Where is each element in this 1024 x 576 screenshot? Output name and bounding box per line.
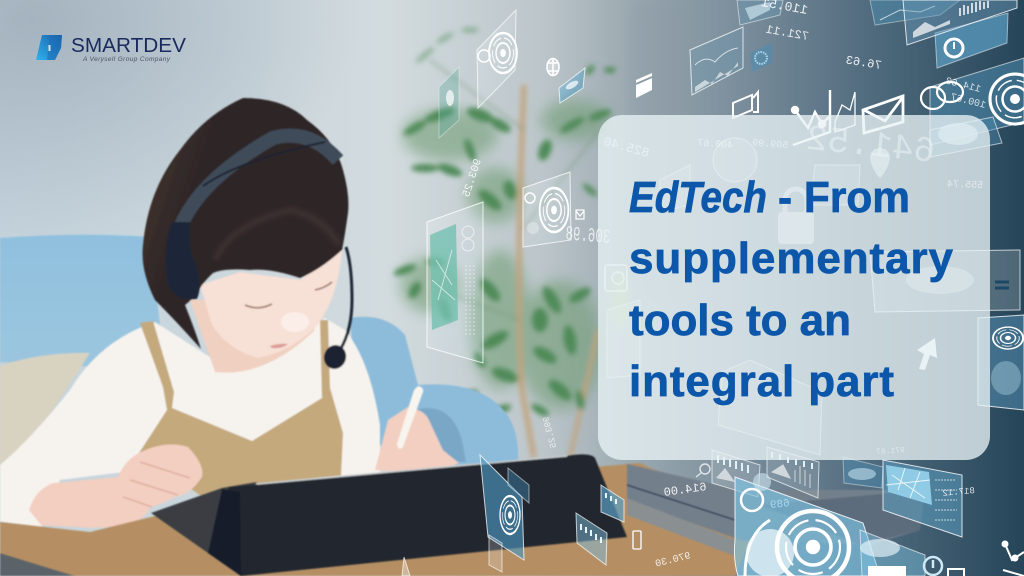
holo tile: dotted ring	[750, 43, 772, 72]
icon: small mail	[576, 210, 584, 219]
white shirt	[0, 318, 380, 528]
holo panel: tablet hub	[480, 455, 529, 572]
faint panel: world map	[870, 250, 1020, 312]
foliage haze	[400, 100, 609, 410]
holo panel: ring top centre	[477, 10, 517, 108]
wooden table	[0, 463, 760, 576]
mic foam	[321, 342, 349, 372]
girl with headset	[0, 98, 459, 528]
icon: video window	[733, 92, 758, 118]
holo panel: chart bars top right	[903, 0, 1017, 45]
holo panel: tablet small tile	[601, 485, 624, 522]
title: - From	[778, 173, 910, 222]
number: 970.30: 970.30	[654, 551, 692, 571]
tagline: A Verysell Group Company	[82, 56, 171, 63]
microphone boom	[340, 247, 352, 350]
holo panel: human ring	[930, 58, 1024, 145]
ear cup	[166, 222, 200, 299]
neck	[190, 300, 315, 373]
floating hologram interface	[402, 0, 1024, 576]
number: 817.12: 817.12	[942, 486, 975, 499]
number: 905 25: 903.25	[541, 415, 559, 449]
number: 555.74: 555.74	[947, 180, 983, 192]
title: supplementary	[629, 234, 954, 283]
holo panel: bar charts lower middle	[767, 447, 819, 498]
icon: globe	[547, 58, 559, 76]
holo panel: human ring: 114.63	[944, 76, 982, 96]
number: 641.52: 641.52	[804, 119, 937, 173]
number: 825.40: 825.40	[602, 134, 651, 161]
icon: line chart	[792, 90, 855, 145]
left arm and hand	[29, 445, 202, 528]
icon: camera	[605, 265, 627, 291]
icon: small cone below tablet	[402, 557, 410, 576]
holo panel: ring beside plant	[523, 172, 571, 247]
holo panel: small upper left	[439, 67, 459, 138]
number: 971.87: 971.87	[876, 446, 905, 457]
title: integral part	[629, 357, 894, 406]
number: 76.63: 76.63	[845, 53, 883, 73]
icon: padlock	[778, 189, 814, 244]
holo panel: right edge ring	[978, 315, 1024, 410]
holo panel: power icon	[935, 13, 1008, 68]
stylus	[397, 386, 423, 449]
beige armchair	[0, 353, 90, 470]
holo panel: green map	[427, 202, 483, 363]
holo panel: city map	[883, 460, 962, 537]
holo panel: main bottom hub	[734, 473, 925, 576]
icon: power ring	[924, 557, 942, 575]
face	[200, 250, 342, 358]
blue sofa	[0, 235, 518, 465]
holo panel: bar charts lower left	[712, 450, 760, 497]
holo panel: blue tiles	[843, 457, 883, 488]
icon: phone	[633, 531, 641, 549]
number: 509.99: 509.99	[752, 139, 788, 152]
number: 689: 689	[769, 498, 790, 512]
hair	[142, 98, 348, 349]
tablet with dark folding case	[151, 454, 627, 576]
icon: chat bubbles	[921, 82, 963, 109]
title: tools to an	[629, 296, 851, 345]
holo panel: top right blue	[870, 0, 960, 25]
number: 306.98: 306.98	[565, 222, 611, 249]
icon: square outline	[948, 569, 964, 576]
stack of books	[627, 464, 925, 556]
icon: location pin	[870, 148, 890, 178]
pinafore dress	[139, 320, 343, 498]
holo panel: tablet bar tile	[576, 513, 607, 565]
title: EdTech	[629, 173, 767, 222]
holo panel: top tile	[737, 0, 783, 25]
icon: cursor arrow	[917, 338, 937, 370]
icon: white line chart bottom right	[1002, 542, 1024, 576]
number: 400.67: 400.67	[697, 139, 733, 152]
right hand	[375, 407, 459, 472]
holo panel: human ring: 100.67	[949, 92, 987, 112]
icon: envelope	[863, 96, 903, 133]
holo panel: small tilted	[559, 68, 585, 103]
number: 721.11: 721.11	[765, 23, 810, 44]
logo mark	[36, 35, 62, 60]
wordmark: SMARTDEV	[71, 35, 187, 57]
logo	[36, 35, 187, 63]
holo panel: chart top	[690, 27, 743, 95]
stems and leaves	[392, 27, 630, 458]
icon: magnifier	[696, 464, 710, 477]
holo panel: brain	[930, 117, 1002, 157]
icon: credit card	[636, 73, 652, 98]
headset band	[176, 136, 338, 240]
houseplant	[392, 27, 630, 458]
number: 614.00: 614.00	[663, 480, 708, 500]
translucent title card	[598, 115, 990, 460]
faint panels in card centre	[607, 138, 860, 455]
number: 903.25: 903.25	[461, 158, 485, 199]
